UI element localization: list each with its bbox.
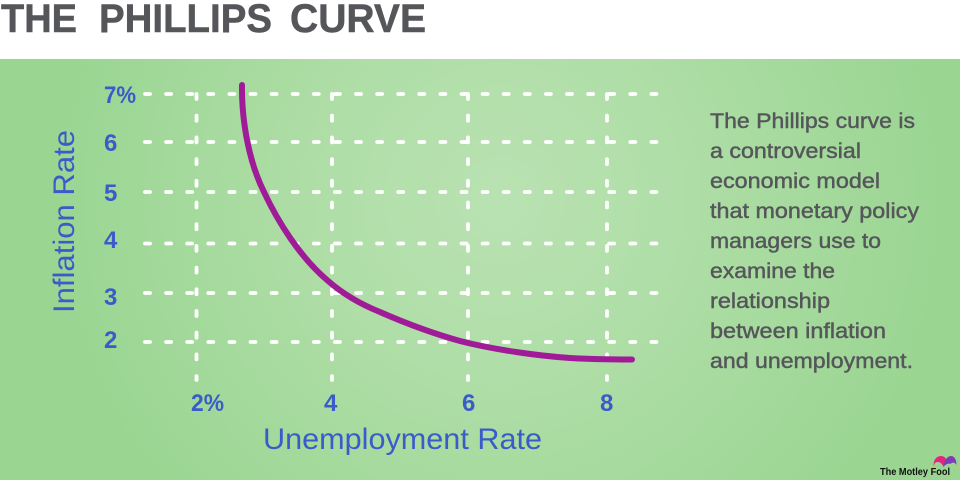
vertical gridlines (196, 94, 607, 380)
y-axis tick labels (104, 82, 136, 354)
x-axis tick labels: 4 (324, 390, 338, 417)
description text: managers use to (710, 229, 881, 253)
y-axis tick labels: 6 (104, 130, 117, 157)
x-axis tick labels: 2% (191, 390, 224, 417)
description text: examine the (710, 259, 835, 283)
logo text: The Motley Fool (880, 466, 950, 478)
x-axis tick labels (191, 390, 613, 417)
description text: economic model (710, 169, 880, 193)
y-axis tick labels: 2 (104, 327, 117, 354)
x-axis tick labels: 8 (600, 390, 613, 417)
horizontal gridlines (145, 94, 657, 342)
description text: and unemployment. (710, 349, 913, 373)
description text: The Phillips curve is (710, 109, 915, 133)
y-axis tick labels: 3 (104, 284, 117, 311)
logo: The Motley Fool (880, 456, 958, 478)
y-axis tick labels: 7% (104, 82, 136, 109)
description text: that monetary policy (710, 199, 919, 223)
curve (242, 85, 632, 360)
x-axis tick labels: 6 (462, 390, 475, 417)
icon: jester hat (932, 456, 958, 468)
description text: a controversial (710, 139, 861, 163)
y-axis tick labels: 5 (104, 180, 117, 207)
title (1, 0, 426, 41)
description text: between inflation (710, 319, 886, 343)
description text (710, 109, 919, 373)
x-axis title: Unemployment Rate (263, 423, 542, 456)
chart: Phillips curve (48, 82, 657, 456)
description text: relationship (710, 289, 830, 313)
y-axis tick labels: 4 (104, 227, 118, 254)
y-axis title: Inflation Rate (48, 130, 81, 313)
